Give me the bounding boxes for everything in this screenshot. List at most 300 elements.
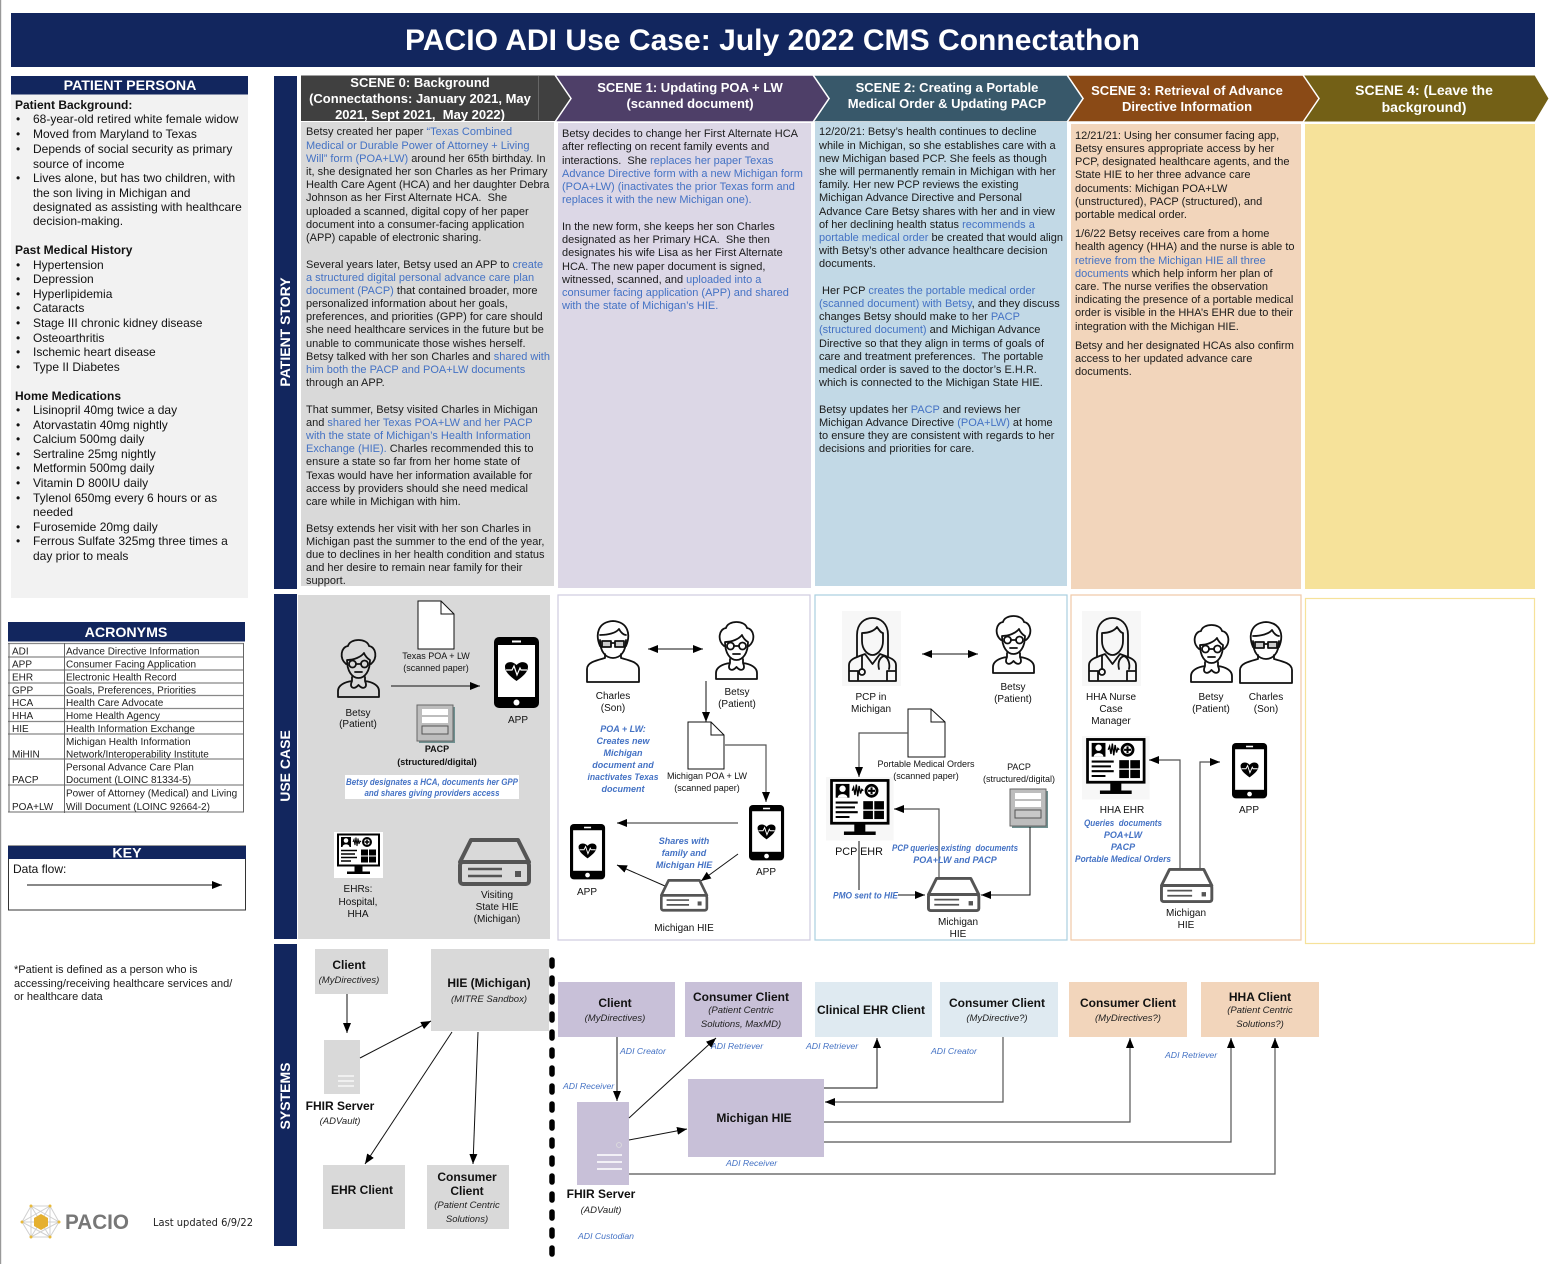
panel: scene 1 story: with the state of Michigan’s HIE. — [561, 300, 718, 312]
panel: scene 0 story: Health Care Agent (HCA) and her daughter Debra — [306, 179, 550, 191]
panel: scene 3 story: State HIE to her three advance care — [1075, 169, 1250, 181]
panel: scene 3 story: retrieve from the Michigan HIE all three — [1075, 255, 1266, 267]
panel: scene 3 story: health agency (HHA) and the nurse is able to — [1075, 241, 1295, 253]
box: EHR Client — [323, 1165, 405, 1229]
panel: scene 3 story: documents: Michigan POA+LW — [1075, 183, 1228, 195]
panel: scene 2 story: 12/20/21: Betsy’s health continues to decline — [819, 126, 1037, 138]
panel: acronyms table: APP — [12, 660, 32, 670]
icon: phone app right — [749, 805, 784, 860]
arrow: document to APP — [725, 745, 766, 802]
caption: POA + LW: POA + LW: — [600, 724, 646, 734]
label: APP left: APP — [577, 887, 597, 898]
panel: scene 2 story: new Michigan based PCP. She feels as though — [819, 153, 1047, 165]
home medications list: Calcium 500mg daily — [33, 432, 144, 446]
label: Betsy — [718, 687, 756, 710]
caption: shares with family: family and — [662, 848, 707, 858]
panel: scene 2 story: Directive so that they align in terms of goals of — [819, 338, 1045, 350]
panel: acronyms table: HCA — [12, 698, 33, 709]
panel: scene 0 story: That summer, Betsy visited Charles in Michigan — [306, 404, 538, 416]
home medications list: Metformin 500mg daily — [33, 461, 154, 475]
caption: queries documents: PACP — [1111, 842, 1136, 852]
panel: patient persona — [11, 76, 248, 598]
label: Michigan HIE: HIE — [1178, 920, 1195, 931]
panel: acronyms table: HHA — [12, 711, 33, 722]
past medical history list: • — [16, 258, 20, 272]
panel: scene 0 story: a structured digital personal advance care plan — [306, 272, 534, 284]
label: APP: APP — [508, 715, 528, 726]
past medical history list: Depression — [33, 272, 94, 286]
arrow: Charles and Betsy — [648, 648, 703, 650]
panel: systems scenes 1 to 3 — [558, 982, 1319, 1241]
panel: scene 3 story: portable medical order. — [1075, 209, 1187, 221]
arrow: APP to APP — [617, 822, 738, 824]
label: Charles: Charles — [596, 691, 630, 702]
panel: scene 2 story: family. Her new PCP reviews the existing — [819, 179, 1018, 191]
arrow: PACP to HIE — [981, 827, 1030, 895]
panel: scene 2 story: changes Betsy should make to her PACP — [819, 311, 1020, 323]
arrow: document to EHR — [859, 733, 908, 777]
panel: scene 3 use case — [1071, 595, 1301, 940]
box: FHIR server: (ADVault) — [320, 1116, 360, 1127]
icon: phone app — [1232, 743, 1267, 798]
header: scene 3 — [1067, 75, 1319, 122]
past medical history list — [15, 243, 203, 374]
caption: POA + LW — [588, 724, 658, 794]
box: FHIR Server: FHIR Server — [567, 1187, 636, 1201]
label: PACP: (structured/digital) — [397, 757, 477, 767]
arrow: PCP and Betsy — [922, 653, 978, 655]
label: EHRs — [339, 884, 377, 920]
label: Betsy: Betsy — [1198, 692, 1224, 703]
arrow: APP to HIE — [701, 854, 738, 881]
label: Betsy: (Patient) — [339, 719, 377, 730]
caption: POA + LW: document and — [592, 760, 654, 770]
label: Michigan HIE — [1166, 908, 1206, 931]
label: PCP EHR: PCP EHR — [835, 846, 883, 858]
header: scene 0: SCENE 0: Background — [350, 75, 490, 90]
home medications list: needed — [33, 505, 73, 519]
label: Betsy: Betsy — [1000, 682, 1026, 693]
panel: scene 2 story: Her PCP creates the portable medical order — [819, 285, 1036, 297]
panel: scene 0 story: Medical or Durable Power of Attorney + Living — [306, 140, 529, 152]
panel: acronyms table: Personal Advance Care Plan — [66, 762, 194, 774]
caption: shares with family: Shares with — [659, 836, 710, 846]
label: Charles: Charles — [1249, 692, 1283, 703]
panel: scene 3 story: Betsy ensures appropriate access by her — [1075, 143, 1275, 155]
caption: PMO sent to HIE: PMO sent to HIE — [833, 890, 899, 900]
caption: POA + LW: document — [601, 784, 645, 794]
panel: scene 2 story: Michigan Advance Directive (POA+LW) at home — [819, 417, 1053, 429]
panel: acronyms table: Document (LOINC 81334-5) — [66, 775, 191, 786]
panel: scene 0 story: ensure a state so far from her home state of — [306, 456, 521, 468]
box: Consumer Client scene 3 — [1069, 982, 1187, 1037]
icon: phone app left — [570, 824, 605, 879]
panel: scene 0 story: Johnson as her First Alternate HCA. She — [306, 192, 507, 204]
icon: Michigan HIE server — [661, 880, 707, 910]
panel: scene 0 story: with the state of Michigan’s Health Information — [305, 430, 531, 442]
label: Michigan POA + LW — [667, 771, 748, 793]
panel: scene 0 use case — [298, 595, 550, 939]
panel: scene 1 story: after reflecting on recent family events and — [562, 141, 769, 153]
box: Consumer Client scene 2 — [940, 982, 1058, 1037]
panel: scene 2 story: she will permanently remain in Michigan with her — [819, 166, 1056, 178]
row label: patient story: PATIENT STORY — [277, 277, 293, 387]
header: scene 4: SCENE 4: (Leave the — [1355, 82, 1493, 98]
panel: scene 2 story: with Betsy’s other advance healthcare decision — [818, 245, 1048, 257]
caption: PCP queries — [892, 843, 1018, 865]
panel: scene 0 story: (APP) capable of electronic sharing. — [306, 232, 481, 244]
panel: scene 0 story: document into a consumer-facing application — [306, 219, 524, 231]
box: FHIR Server: (ADVault) — [581, 1205, 621, 1216]
label: Michigan HIE — [938, 917, 978, 940]
label: Texas POA + LW: Texas POA + LW — [402, 651, 470, 661]
icon: Michigan HIE server — [928, 878, 979, 911]
patient background list: • — [16, 112, 20, 126]
header: scene 2 — [813, 75, 1083, 122]
panel: scene 0 story: support. — [306, 575, 346, 587]
logo: PACIO: PACIO — [65, 1211, 129, 1234]
caption: POA + LW: Creates new — [596, 736, 651, 746]
box: Consumer Client scene 1 — [685, 982, 802, 1037]
label: EHRs: EHRs: — [344, 884, 372, 895]
panel: scene 1 story: Advance Directive form with a new Michigan form — [562, 168, 803, 180]
label: Betsy: Betsy — [345, 708, 371, 719]
panel: acronyms table: Power of Attorney (Medical) and Living — [66, 788, 237, 800]
panel: scene 2 story: portable medical order be created that would align — [819, 232, 1063, 244]
icon: HIE server — [460, 840, 529, 884]
home medications list: • — [16, 520, 20, 534]
panel: systems scene 0 — [306, 949, 549, 1229]
arrow: HIE to APP — [617, 865, 665, 886]
patient background list: source of income — [33, 157, 125, 171]
home medications list: • — [16, 432, 20, 446]
header: scene 0: 2021, Sept 2021, May 2022) — [335, 107, 505, 122]
panel: scene 0 story: Betsy created her paper “Texas Combined — [306, 126, 512, 138]
past medical history list: • — [16, 360, 20, 374]
panel: acronyms table: Health Information Exchange — [66, 724, 195, 735]
icon: HHA EHR monitor — [1082, 736, 1150, 799]
label: Betsy: (Patient) — [994, 694, 1032, 705]
box: HIE Michigan — [431, 949, 549, 1031]
patient background list: designated as assisting with healthcare — [33, 200, 242, 214]
labels: ADI roles: ADI Creator — [930, 1046, 978, 1056]
arrows: system data flows — [617, 1037, 1275, 1174]
caption: queries documents — [1075, 818, 1171, 864]
arrow: Client to FHIR — [346, 994, 348, 1033]
header: scene 3: Directive Information — [1122, 99, 1252, 114]
panel: scene 0 story: document (PACP) that contained broader, more — [306, 285, 538, 297]
panel: scene 1 story: interactions. She replaces her paper Texas — [562, 155, 774, 167]
labels: ADI roles: ADI Custodian — [577, 1231, 634, 1241]
arrow: FHIR to HIE — [360, 1021, 431, 1058]
box: Consumer Client: Client — [450, 1184, 484, 1198]
caption: queries documents: Portable Medical Orders — [1075, 854, 1171, 864]
panel: scene 3 story: documents which help inform her plan of — [1075, 268, 1273, 280]
patient background list — [15, 98, 242, 228]
icon: paper document — [908, 709, 945, 757]
patient background list: decision-making. — [33, 214, 123, 228]
panel: scene 0 story: and her desire to remain near family for their — [306, 562, 523, 574]
panel: scene 2 story: medical order is saved to the doctor’s E.H.R. — [819, 364, 1037, 376]
label: Michigan HIE: Michigan HIE — [654, 923, 714, 934]
icon: Betsy — [993, 616, 1034, 673]
panel: scene 0 story: due to declines in her health condition and status — [306, 549, 545, 561]
panel: acronyms table: PACP — [12, 775, 39, 786]
panel: acronyms table: ADI — [12, 646, 29, 658]
callout: Betsy designates — [345, 775, 519, 799]
icon: EHR monitor — [334, 832, 383, 878]
panel: acronyms table: Health Care Advocate — [66, 698, 164, 709]
box: Consumer Client scene 3: (MyDirectives?) — [1095, 1013, 1161, 1024]
panel: acronyms table: Network/Interoperability Institute — [66, 750, 209, 760]
box: Consumer Client scene 2: (MyDirective?) — [966, 1013, 1028, 1024]
past medical history list: Cataracts — [33, 301, 84, 315]
panel: scene 0 story: him both the PACP and POA+LW documents — [306, 364, 526, 376]
caption: queries documents: Queries documents — [1084, 818, 1162, 828]
past medical history list: Ischemic heart disease — [33, 345, 156, 359]
panel: scene 2 use case — [815, 595, 1067, 940]
box: HHA Client: Solutions?) — [1236, 1019, 1284, 1030]
arrow: HIE to EHR — [894, 809, 939, 877]
panel: acronyms table: MiHIN — [12, 750, 40, 760]
header: scene 4 — [1302, 75, 1549, 122]
past medical history list: • — [16, 331, 20, 345]
box: HHA Client: HHA Client — [1229, 990, 1291, 1004]
row label: systems — [274, 944, 297, 1246]
home medications list: Ferrous Sulfate 325mg three times a — [33, 534, 228, 548]
row label: use case — [274, 594, 297, 939]
panel: scene 0 story: Betsy talked with her son Charles and shared with — [306, 351, 550, 363]
title banner: PACIO ADI Use Case: July 2022 CMS Connectathon — [405, 24, 1140, 57]
labels: ADI roles: ADI Retriever — [710, 1041, 764, 1051]
panel: key: Data flow: — [13, 862, 66, 876]
label: APP: APP — [1239, 805, 1259, 816]
panel: scene 3 story: PCP, designated healthcare agents, and the — [1075, 156, 1289, 168]
panel: scene 1 story: designates his wife Lisa as her First Alternate — [562, 247, 783, 259]
label: HHA EHR: HHA EHR — [1100, 805, 1144, 816]
panel: acronyms table: Electronic Health Record — [66, 672, 177, 684]
panel: scene 3 story: Betsy and her designated HCAs also confirm — [1075, 340, 1294, 352]
label: Betsy: Betsy — [724, 687, 750, 698]
panel: scene 2 story: to ensure they are consistent with regards to her — [819, 430, 1055, 442]
label: HHA Nurse Case Manager — [1086, 692, 1136, 727]
label: PACP: (structured/digital) — [983, 774, 1055, 784]
home medications list: Furosemide 20mg daily — [33, 520, 158, 534]
panel: scene 1 story: designated as her Primary HCA. She then — [562, 234, 770, 246]
panel: scene 2 story: Betsy updates her PACP and reviews her — [819, 404, 1021, 416]
box: Consumer Client: Solutions) — [446, 1214, 488, 1225]
icon: phone app — [494, 637, 539, 708]
panel: scene 1 story: In the new form, she keeps her son Charles — [562, 221, 775, 233]
arrow: Betsy to APP — [391, 685, 480, 687]
panel: scene 2 story: decisions and priorities for care. — [819, 443, 974, 455]
label: Betsy — [994, 682, 1032, 705]
panel: scene 0 story: Will” form (POA+LW) around her 65th birthday. In — [306, 153, 546, 165]
label: Michigan HIE: HIE — [950, 929, 967, 940]
caption: queries documents: POA+LW — [1104, 830, 1144, 840]
label: Visiting State HIE: (Michigan) — [474, 914, 520, 925]
box: Consumer Client scene 1: Consumer Client — [693, 990, 789, 1004]
label: Betsy: (Patient) — [1192, 704, 1230, 715]
label: Texas POA + LW: (scanned paper) — [403, 663, 469, 673]
labels: ADI roles — [562, 1041, 1218, 1241]
header: scene 1: (scanned document) — [626, 96, 754, 111]
past medical history list: • — [16, 287, 20, 301]
panel: scene 2 story: while in Michigan, so she establishes care with a — [818, 140, 1057, 152]
panel: scene 0 story: she need healthcare services in the future but be — [306, 324, 544, 336]
label: Betsy — [1192, 692, 1230, 715]
label: PACP — [983, 762, 1055, 784]
panel: scene 2 story: (scanned document) with Betsy, and they discuss — [819, 298, 1060, 310]
past medical history list: Type II Diabetes — [33, 360, 120, 374]
header: scene 4: background) — [1382, 99, 1466, 115]
patient background list: • — [16, 127, 20, 141]
label: PACP: PACP — [1007, 762, 1031, 772]
divider: dashed scene separator — [549, 960, 555, 1258]
caption: shares with family — [656, 836, 713, 870]
panel: scene 3 story: integration with the Michigan HIE. — [1075, 321, 1239, 333]
panel: acronyms table: GPP — [12, 686, 33, 696]
arrow: Betsy to document — [705, 681, 707, 722]
home medications list: Sertraline 25mg nightly — [33, 447, 156, 461]
past medical history list: Hypertension — [33, 258, 104, 272]
caption: POA + LW: Michigan — [603, 748, 643, 758]
panel: scene 0 story: personalized information about her goals, — [306, 298, 508, 310]
row label: systems: SYSTEMS — [277, 1063, 293, 1129]
label: Betsy: (Patient) — [718, 699, 756, 710]
panel: acronyms table: Advance Directive Information — [66, 646, 199, 658]
label: HHA Nurse Case Manager: HHA Nurse — [1086, 692, 1136, 703]
labels: ADI roles: ADI Retriever — [805, 1041, 859, 1051]
panel: scene 0 story: Texas would have her information available for — [306, 470, 533, 482]
box: FHIR server: FHIR Server — [306, 1099, 375, 1113]
panel: acronyms table — [8, 622, 245, 813]
box: Consumer Client scene 3: Consumer Client — [1080, 996, 1176, 1010]
box: FHIR Server — [567, 1102, 636, 1216]
arrow: EHR to HIE — [859, 841, 925, 895]
arrow: HIE to Consumer Client — [473, 1032, 478, 1164]
box: Client: (MyDirectives) — [319, 975, 379, 986]
panel: scene 3 story: order is visible in the HHA’s EHR due to their — [1075, 307, 1293, 319]
label: Texas POA + LW — [402, 651, 470, 673]
home medications list: Lisinopril 40mg twice a day — [33, 403, 177, 417]
panel: scene 0 story: unable to communicate those wishes herself. — [306, 338, 526, 350]
label: HHA Nurse Case Manager: Manager — [1091, 716, 1131, 727]
header: scene 0: (Connectathons: January 2021, May — [309, 91, 532, 106]
icon: PCP EHR monitor — [826, 777, 894, 840]
home medications list: • — [16, 491, 20, 505]
panel: scene 2 story: Advance Care Betsy shares with her and in view — [819, 206, 1055, 218]
panel: acronyms table: Goals, Preferences, Priorities — [66, 686, 196, 696]
label: Visiting State HIE: Visiting — [481, 890, 513, 901]
home medications list: • — [16, 418, 20, 432]
box: Consumer Client — [427, 1165, 509, 1229]
arrow: HIE to HHA EHR — [1149, 760, 1180, 868]
panel: scene 2 story — [815, 122, 1067, 586]
caption: PCP queries: PCP queries existing documents — [892, 843, 1018, 853]
panel: scene 2 story: of her declining health status recommends a — [819, 219, 1036, 231]
home medications list: Home Medications — [15, 389, 121, 403]
patient background list: Depends of social security as primary — [33, 142, 232, 156]
box: EHR Client: EHR Client — [331, 1183, 393, 1197]
label: PCP in Michigan: PCP in — [856, 692, 886, 703]
past medical history list: Past Medical History — [15, 243, 133, 257]
callout: Betsy designates: Betsy designates a HCA, documents her GPP — [346, 777, 519, 787]
panel: scene 1 story: HCA. The new paper document is signed, — [562, 261, 765, 273]
panel: scene 3 story: documents. — [1075, 366, 1132, 378]
patient background list: Moved from Maryland to Texas — [33, 127, 197, 141]
panel: scene 1 story: Betsy decides to change her First Alternate HCA — [562, 128, 799, 140]
icon: PACP form — [417, 705, 455, 743]
home medications list: Atorvastatin 40mg nightly — [33, 418, 168, 432]
panel: scene 2 story: Michigan Advance Directive and Personal — [819, 192, 1022, 204]
last updated note: Last updated 6/9/22 — [153, 1217, 253, 1229]
label: EHRs: Hospital, — [339, 897, 377, 908]
footnote: patient definition: or healthcare data — [14, 991, 104, 1003]
header: scene 2: SCENE 2: Creating a Portable — [856, 80, 1038, 95]
icon: Charles — [1240, 622, 1292, 683]
header: scene 3: SCENE 3: Retrieval of Advance — [1091, 83, 1283, 98]
icon: Charles — [587, 621, 639, 682]
panel: acronyms table: HIE — [12, 724, 29, 735]
icon: Betsy — [1191, 625, 1232, 682]
panel: scene 2 story: documents. — [819, 258, 876, 270]
home medications list: Vitamin D 800IU daily — [33, 476, 148, 490]
header: scene 2: Medical Order & Updating PACP — [848, 96, 1047, 111]
caption: PCP queries: POA+LW and PACP — [913, 855, 998, 865]
panel: scene 0 story — [301, 122, 554, 587]
panel: scene 3 story: 12/21/21: Using her consumer facing app, — [1075, 130, 1279, 142]
labels: ADI roles: ADI Receiver — [725, 1158, 778, 1168]
label: EHRs: HHA — [347, 909, 369, 920]
label: Charles: (Son) — [1254, 704, 1278, 715]
home medications list — [15, 389, 228, 563]
panel: scene 1 story: (POA+LW) (inactivates the prior Texas form and — [562, 181, 795, 193]
header: scene 1: SCENE 1: Updating POA + LW — [597, 80, 783, 95]
past medical history list: • — [16, 316, 20, 330]
labels: ADI roles: ADI Creator — [619, 1046, 667, 1056]
icon: PACP form — [1010, 789, 1048, 828]
panel: scene 0 story: care while in Michigan with him. — [306, 496, 461, 508]
patient background list: • — [16, 171, 20, 185]
label: Michigan HIE: Michigan — [938, 917, 978, 928]
footnote: patient definition — [14, 964, 233, 1003]
panel: scene 1 story: replaces it with the new Michigan one). — [562, 194, 752, 206]
panel: scene 3 story: care. The nurse verifies the observation — [1075, 281, 1268, 293]
icon: HHA nurse — [1082, 611, 1141, 686]
label: PCP in Michigan — [851, 692, 891, 715]
past medical history list: • — [16, 345, 20, 359]
labels: ADI roles: ADI Receiver — [562, 1081, 615, 1091]
label: Charles: (Son) — [601, 703, 625, 714]
panel: scene 0 story: preferences, and priorities (GPP) for care should — [306, 311, 543, 323]
panel: scene 1 story: witnessed, scanned, and uploaded into a — [561, 274, 762, 286]
label: Michigan POA + LW: (scanned paper) — [674, 783, 740, 793]
patient background list: Lives alone, but has two children, with — [33, 171, 235, 185]
footnote: patient definition: *Patient is defined as a person who is — [14, 964, 198, 976]
box: Consumer Client: (Patient Centric — [434, 1200, 500, 1211]
patient background list: 68-year-old retired white female widow — [33, 112, 239, 126]
arrow: HIE to EHR Client — [365, 1032, 452, 1164]
label: Visiting State HIE — [474, 890, 520, 925]
past medical history list: Osteoarthritis — [33, 331, 104, 345]
box: HIE Michigan: (MITRE Sandbox) — [451, 994, 527, 1005]
arrow: HIE to APP — [1200, 762, 1220, 868]
panel: acronyms table: POA+LW — [12, 802, 54, 813]
box: Clinical EHR Client — [815, 982, 932, 1037]
panel: scene 0 story: it, she designated her son Charles as her Primary — [306, 166, 548, 178]
label: PCP in Michigan: Michigan — [851, 704, 891, 715]
